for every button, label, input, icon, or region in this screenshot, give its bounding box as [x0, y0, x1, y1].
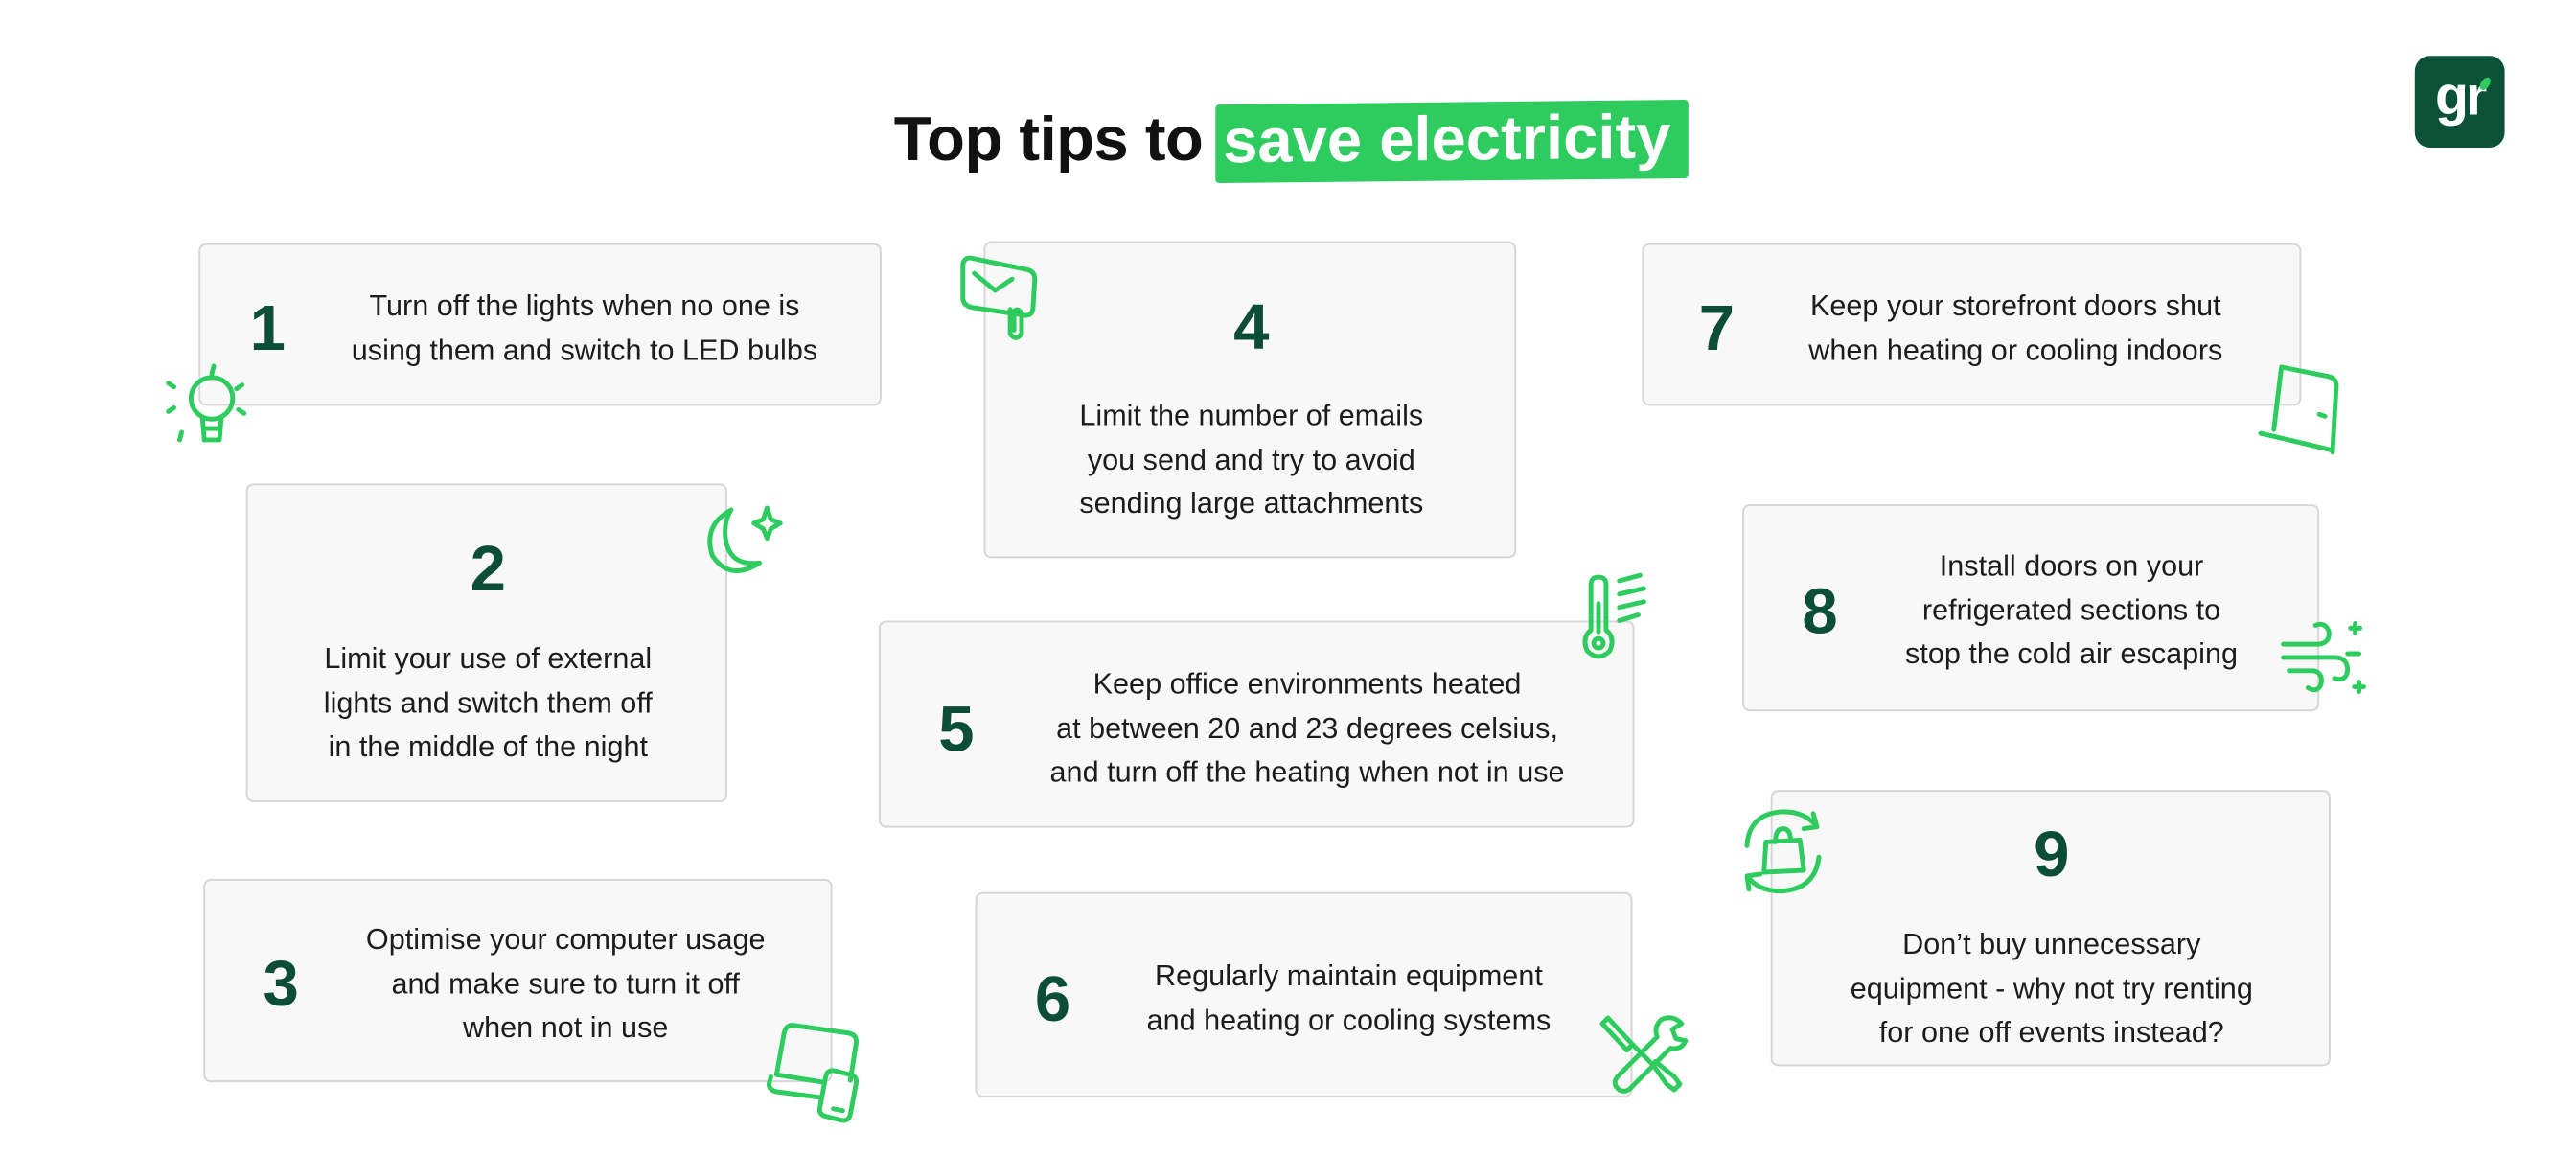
- panel: tip 8: stop the cold air escaping: [1905, 636, 2238, 670]
- panel: tip 9: equipment - why not try renting: [1851, 971, 2253, 1005]
- panel: tip 3: and make sure to turn it off: [392, 966, 740, 1000]
- panel: tip 8: [1742, 504, 2319, 711]
- panel: tip 1: using them and switch to LED bulbs: [352, 333, 817, 366]
- panel: tip 3: 3: [263, 948, 299, 1020]
- panel: tip 5: at between 20 and 23 degrees celsius,: [1056, 711, 1558, 745]
- panel: tip 6: and heating or cooling systems: [1147, 1003, 1551, 1036]
- panel: tip 7: when heating or cooling indoors: [1808, 333, 2222, 366]
- panel: tip 7: Keep your storefront doors shut: [1810, 289, 2221, 322]
- title highlight: save electricity: [1223, 101, 1670, 175]
- panel: tip 9: for one off events instead?: [1879, 1015, 2224, 1049]
- panel: tip 1: 1: [250, 292, 286, 364]
- icon: door: [2258, 364, 2338, 454]
- panel: tip 5: 5: [938, 693, 975, 765]
- panel: tip 5: Keep office environments heated: [1093, 667, 1521, 701]
- panel: tip 4: sending large attachments: [1079, 487, 1423, 520]
- panel: tip 5: [879, 620, 1635, 828]
- panel: tip 5: and turn off the heating when not in use: [1050, 755, 1565, 788]
- panel: tip 7: 7: [1699, 292, 1735, 364]
- icon: email attachment: [960, 255, 1037, 340]
- logo: [2415, 56, 2505, 148]
- panel: tip 2: 2: [471, 533, 506, 605]
- icon: laptop and phone: [767, 1023, 859, 1123]
- panel: tip 7: [1642, 243, 2301, 405]
- panel: tip 8: Install doors on your: [1940, 549, 2203, 582]
- panel: tip 1: [198, 243, 882, 405]
- icon: wrench and screwdriver: [1600, 1015, 1689, 1094]
- icon: bag with recycle arrows: [1744, 809, 1821, 893]
- panel: tip 4: 4: [1233, 291, 1269, 363]
- icon: wind: [2281, 621, 2366, 694]
- title: Top tips to: [894, 104, 1203, 173]
- panel: tip 6: [976, 892, 1633, 1097]
- title: [894, 100, 1689, 183]
- panel: tip 9: [1771, 790, 2331, 1066]
- panel: tip 3: when not in use: [463, 1010, 668, 1044]
- panel: tip 8: refrigerated sections to: [1922, 593, 2220, 626]
- panel: tip 9: 9: [2034, 819, 2069, 890]
- panel: tip 4: you send and try to avoid: [1088, 443, 1415, 475]
- panel: tip 9: Don’t buy unnecessary: [1902, 928, 2200, 960]
- panel: tip 2: Limit your use of external: [324, 641, 652, 675]
- panel: tip 4: Limit the number of emails: [1079, 399, 1423, 431]
- icon: moon and star: [707, 506, 783, 573]
- panel: tip 8: 8: [1802, 575, 1838, 647]
- panel: tip 2: [246, 483, 727, 802]
- panel: tip 4: [983, 242, 1516, 558]
- icon: thermometer: [1582, 573, 1646, 659]
- panel: tip 2: in the middle of the night: [329, 729, 648, 763]
- panel: tip 3: Optimise your computer usage: [366, 923, 766, 956]
- panel: tip 6: Regularly maintain equipment: [1155, 959, 1543, 992]
- panel: tip 3: [203, 879, 833, 1082]
- panel: tip 6: 6: [1035, 963, 1070, 1035]
- logo: gr: [2435, 65, 2484, 127]
- panel: tip 2: lights and switch them off: [324, 685, 653, 719]
- icon: light bulb: [166, 364, 247, 443]
- panel: tip 1: Turn off the lights when no one is: [369, 289, 799, 322]
